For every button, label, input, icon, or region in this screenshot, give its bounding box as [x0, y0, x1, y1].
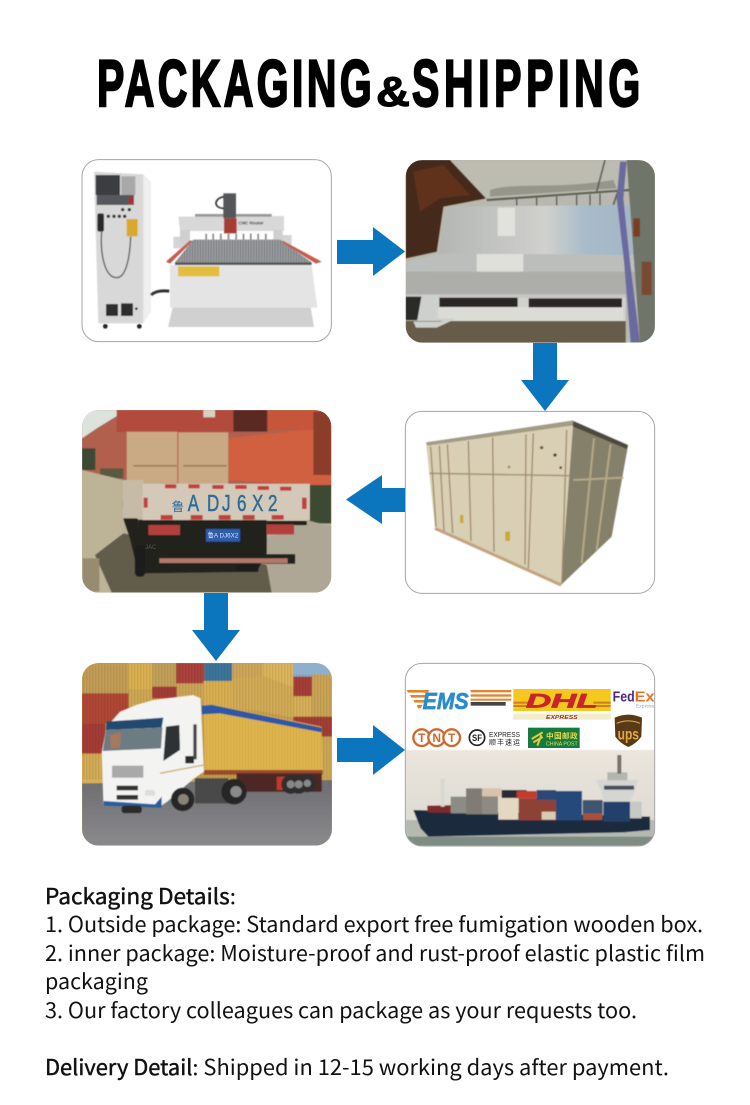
icon: SF Express logo: [469, 730, 520, 746]
title: SHIPPING: [412, 46, 640, 120]
title: [97, 46, 640, 120]
panel: container truck: [82, 663, 332, 846]
icon: SF Express logo: 顺丰速运: [489, 737, 520, 746]
arrow: crate to truck: [346, 475, 405, 524]
text block: packaging details: 2. inner package: Moisture-proof and rust-proof elastic plastic film: [45, 937, 705, 968]
icon: DHL logo: EXPRESS: [546, 715, 578, 721]
text block: packaging details: 1. Outside package: Standard export free fumigation wooden box.: [45, 908, 703, 939]
icon: DHL logo: DHL: [526, 692, 598, 713]
panel: truck with wooden crates: JAC: [145, 545, 157, 551]
icon: TNT logo: N: [432, 731, 441, 745]
title: &: [376, 68, 410, 115]
arrow: truck to container truck: [192, 593, 240, 661]
icon: UPS logo: [615, 715, 642, 747]
icon: router machine bed: [166, 193, 322, 327]
icon: China Post logo: 中国邮政: [546, 731, 578, 741]
arrow: film wrap to crate: [521, 343, 569, 411]
icon: FedEx logo: Fed: [613, 690, 635, 706]
icon: FedEx logo: [613, 690, 654, 708]
panel: wooden crate: [405, 411, 655, 593]
text block: packaging details: [45, 880, 705, 1025]
icon: China Post logo: CHINA POST: [546, 742, 578, 748]
panel: truck with wooden crates: 鲁: [172, 500, 184, 514]
icon: TNT logo: [413, 729, 460, 746]
icon: UPS logo: ups: [618, 726, 639, 743]
text block: delivery detail: Delivery Detail: Shipped in 12-15 working days after payment.: [45, 1051, 669, 1082]
icon: control cabinet: [94, 172, 169, 329]
title: PACKAGING: [97, 46, 372, 120]
icon: EMS logo: [406, 690, 512, 710]
icon: TNT logo: T: [448, 731, 456, 745]
arrow: container truck to shipping: [337, 725, 405, 775]
panel: truck with wooden crates: 鲁A DJ6X2: [208, 531, 239, 540]
icon: flatbed truck: [123, 432, 310, 577]
icon: DHL logo: [513, 689, 611, 721]
arrow: machine to film wrap: [337, 227, 405, 276]
icon: China Post logo: [528, 728, 580, 748]
icon: SF Express logo: SF: [472, 733, 482, 743]
icon: container ship: [405, 750, 655, 846]
panel: couriers and container ship: [405, 663, 656, 846]
text block: packaging details: Packaging Details :: [45, 880, 236, 911]
panel: truck with wooden crates: ADJ6X2: [188, 492, 277, 517]
icon: TNT logo: T: [418, 731, 426, 745]
icon: FedEx logo: Ex: [635, 690, 656, 706]
icon: SF Express logo: EXPRESS: [489, 732, 520, 739]
icon: EMS logo: EMS: [423, 688, 469, 714]
text block: packaging details: 3. Our factory colleagues can package as your requests too.: [45, 994, 637, 1025]
text block: packaging details: packaging: [45, 965, 148, 996]
icon: FedEx logo: Express: [636, 704, 655, 710]
panel: CNC router machine: [82, 160, 331, 342]
icon: semi truck with yellow container: [102, 695, 323, 813]
panel: truck with wooden crates: [82, 410, 331, 593]
icon: router machine bed: CNC Router: [239, 220, 264, 226]
panel: machine wrapped in plastic film: [406, 160, 655, 343]
